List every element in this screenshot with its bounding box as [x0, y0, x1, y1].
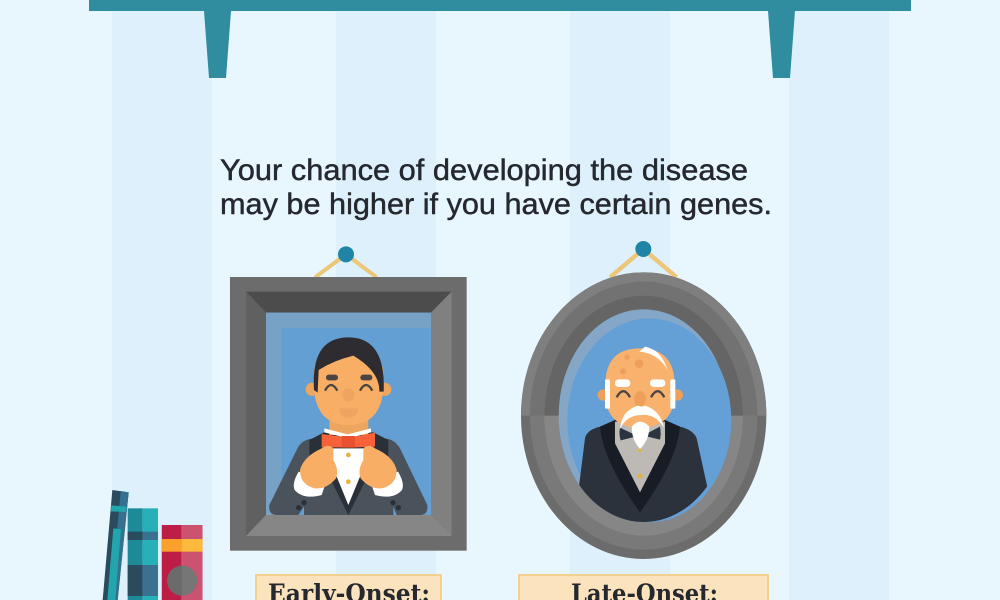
red book: [162, 525, 203, 600]
hanging wire and pin: [315, 246, 377, 277]
intro text: may be higher if you have certain genes.: [220, 188, 772, 221]
label: late-onset: [519, 575, 768, 600]
framed portrait: young man: [230, 246, 467, 551]
shelf with brackets: [89, 0, 911, 78]
teal book: [128, 508, 158, 600]
intro text: Your chance of developing the disease: [220, 154, 748, 187]
square frame: [230, 277, 467, 551]
hanging wire and pin: [610, 241, 677, 277]
old man figure: [578, 347, 708, 535]
tilted book: [103, 490, 129, 600]
stack of books: [103, 490, 203, 600]
framed portrait: old man: [521, 241, 766, 559]
man figure: [269, 337, 427, 515]
oval frame: [521, 272, 766, 559]
